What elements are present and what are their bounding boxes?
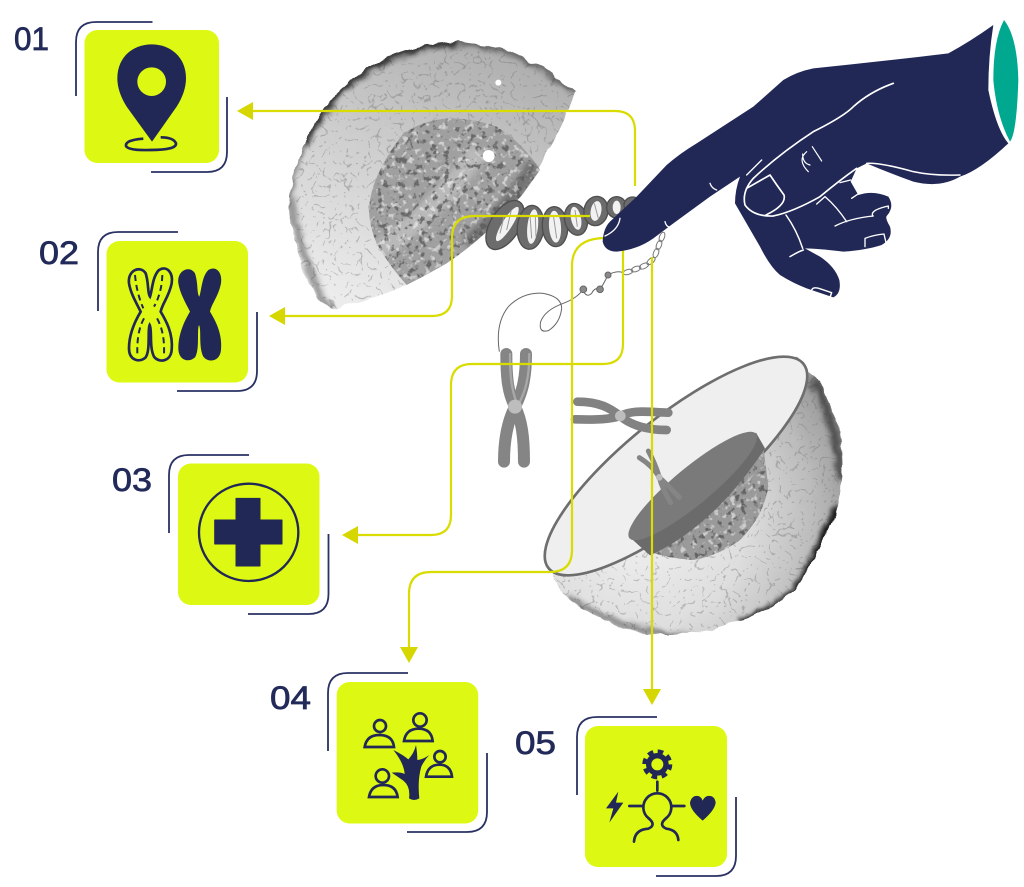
number 02: 02 [39,235,79,271]
icon: wellbeing figure [606,752,716,842]
thin DNA strand and thread to chromosome [498,231,666,352]
number 03: 03 [112,462,152,498]
connector arrow to 02 [269,216,590,325]
connector arrow to 03 [342,245,623,544]
bracket 01 [76,22,227,172]
icon: chromosome pair [129,269,221,361]
chromosome: small, on the nucleus [639,451,679,503]
card 04: family tree [337,682,478,824]
card 03: medical cross [178,464,320,605]
card 01: location pin [84,30,219,163]
icon: map pin [117,44,186,150]
cell hemisphere: upper nucleus cutaway [280,30,580,317]
pointing hand [603,25,1008,297]
bracket 04 [328,673,487,832]
bracket 03 [169,455,328,614]
connector arrow to 01 [237,102,635,186]
connector arrow to 04 [400,238,606,663]
bracket 05 [577,717,736,876]
card 02: chromosomes [106,241,248,382]
number 05: 05 [515,725,556,761]
card 05: person with gear, energy and heart [585,726,727,867]
chromosome: horizontal [575,402,668,430]
wrist cuff: teal ellipse [993,20,1018,142]
chromosome: vertical [504,354,529,462]
icon: tree and people [365,713,452,800]
cell hemisphere: lower bowl with nucleus [543,355,842,636]
number 01: 01 [14,21,49,57]
hand contour lines [605,83,960,297]
bracket 02 [98,232,257,391]
connector arrow to 05 [643,257,661,705]
number 04: 04 [270,680,311,716]
DNA double helix coil [478,194,641,256]
icon: cross in circle [199,484,298,581]
